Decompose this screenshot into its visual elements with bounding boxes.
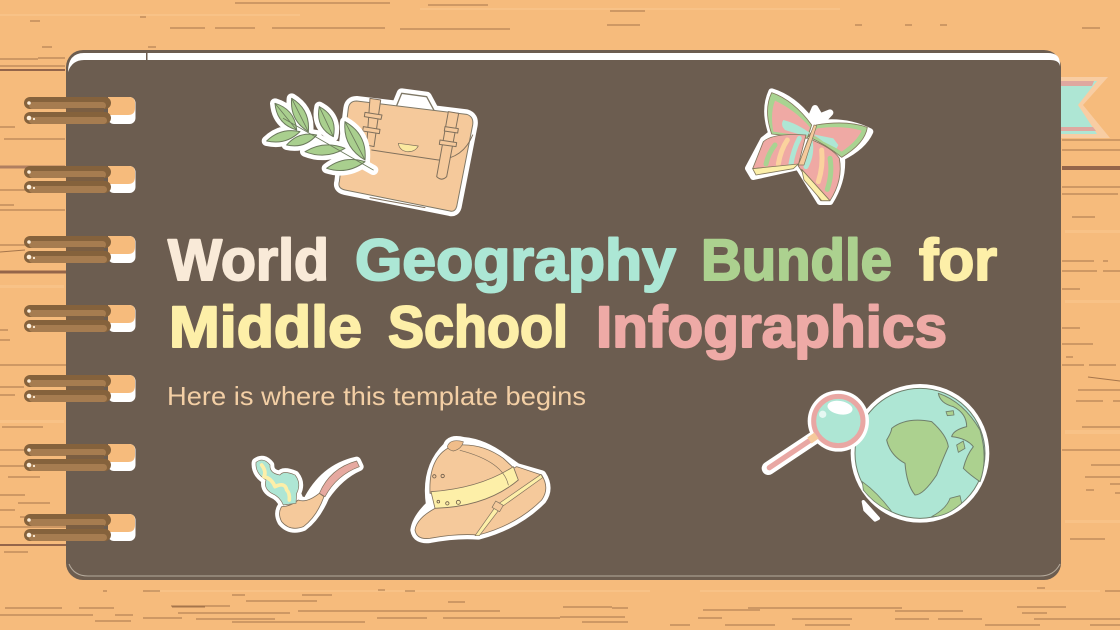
icon: briefcase with leaf branch: [267, 93, 473, 211]
icon: leaf branch: [267, 98, 373, 171]
icon: magnifying glass: [768, 390, 869, 468]
title word: School: School: [388, 295, 568, 360]
title word: Bundle: Bundle: [701, 228, 892, 293]
spiral holes: [108, 97, 136, 541]
notebook cover: [66, 50, 1061, 580]
title word: Middle: Middle: [169, 295, 362, 360]
title word: Infographics: Infographics: [596, 295, 947, 360]
icon: globe: [851, 384, 989, 523]
icon: pith helmet: [415, 441, 546, 539]
icon: briefcase: [339, 93, 473, 211]
title: [168, 228, 997, 360]
icon: smoking pipe: [256, 460, 359, 528]
spiral rings: [24, 97, 111, 541]
helmet sticker outline: [415, 441, 546, 539]
pipe sticker outline: [256, 460, 359, 528]
icon: globe with magnifying glass: [768, 384, 989, 523]
title word: World: World: [168, 228, 329, 293]
title word: Geography: Geography: [355, 228, 676, 293]
subtitle: Here is where this template begins: [167, 381, 586, 411]
bookmark ribbon: [1060, 77, 1110, 138]
butterfly sticker outline: [748, 92, 870, 202]
title word: for: for: [919, 228, 997, 293]
icon: butterfly: [748, 92, 870, 202]
